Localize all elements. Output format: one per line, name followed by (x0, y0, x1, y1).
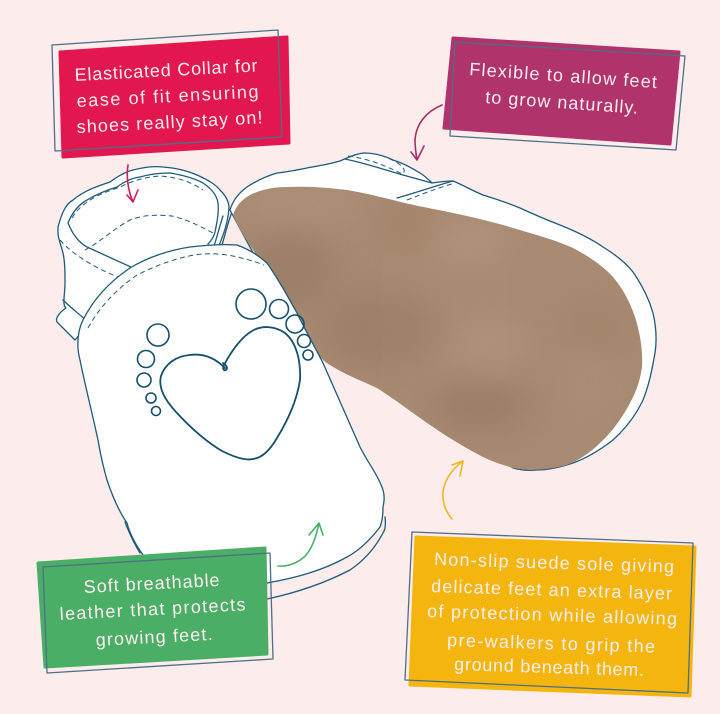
illustration: back shoe (57, 167, 232, 340)
callout: elastic collar: ease of fit ensuring (76, 81, 259, 111)
callout: leather (38, 548, 273, 673)
arrow: leather (278, 523, 323, 566)
callout: flexible: to grow naturally. (485, 87, 639, 118)
arrow: flexible (411, 105, 442, 160)
callout: leather: leather that protects (59, 594, 246, 624)
callout: leather: growing feet. (95, 624, 213, 650)
callout: suede sole: ground beneath them. (454, 654, 644, 680)
callout: flexible (444, 38, 685, 150)
callout: elastic collar: shoes really stay on! (76, 107, 263, 137)
front stitching (88, 254, 264, 328)
callout: leather: Soft breathable (83, 570, 220, 597)
callout: suede sole: Non-slip suede sole giving (434, 549, 674, 577)
toes left (137, 324, 169, 416)
callout: suede sole (405, 532, 695, 696)
illustration: sole shoe (230, 153, 656, 470)
illustration: front shoe (78, 245, 385, 599)
collar stitching (60, 176, 213, 277)
callout: flexible: Flexible to allow feet (469, 59, 658, 92)
callout: elastic collar (52, 30, 289, 157)
collar rim (68, 173, 218, 268)
callout: suede sole: pre-walkers to grip the (447, 630, 655, 657)
toes right (236, 289, 313, 360)
arrow: collar (127, 165, 138, 202)
callout: elastic collar: Elasticated Collar for (74, 55, 258, 85)
callout: suede sole: delicate feet an extra layer (431, 576, 672, 604)
arrow: sole (443, 461, 463, 519)
heart (160, 327, 300, 459)
strap (345, 159, 453, 198)
suede sole (225, 180, 650, 475)
callout: suede sole: of protection while allowing (427, 601, 677, 629)
